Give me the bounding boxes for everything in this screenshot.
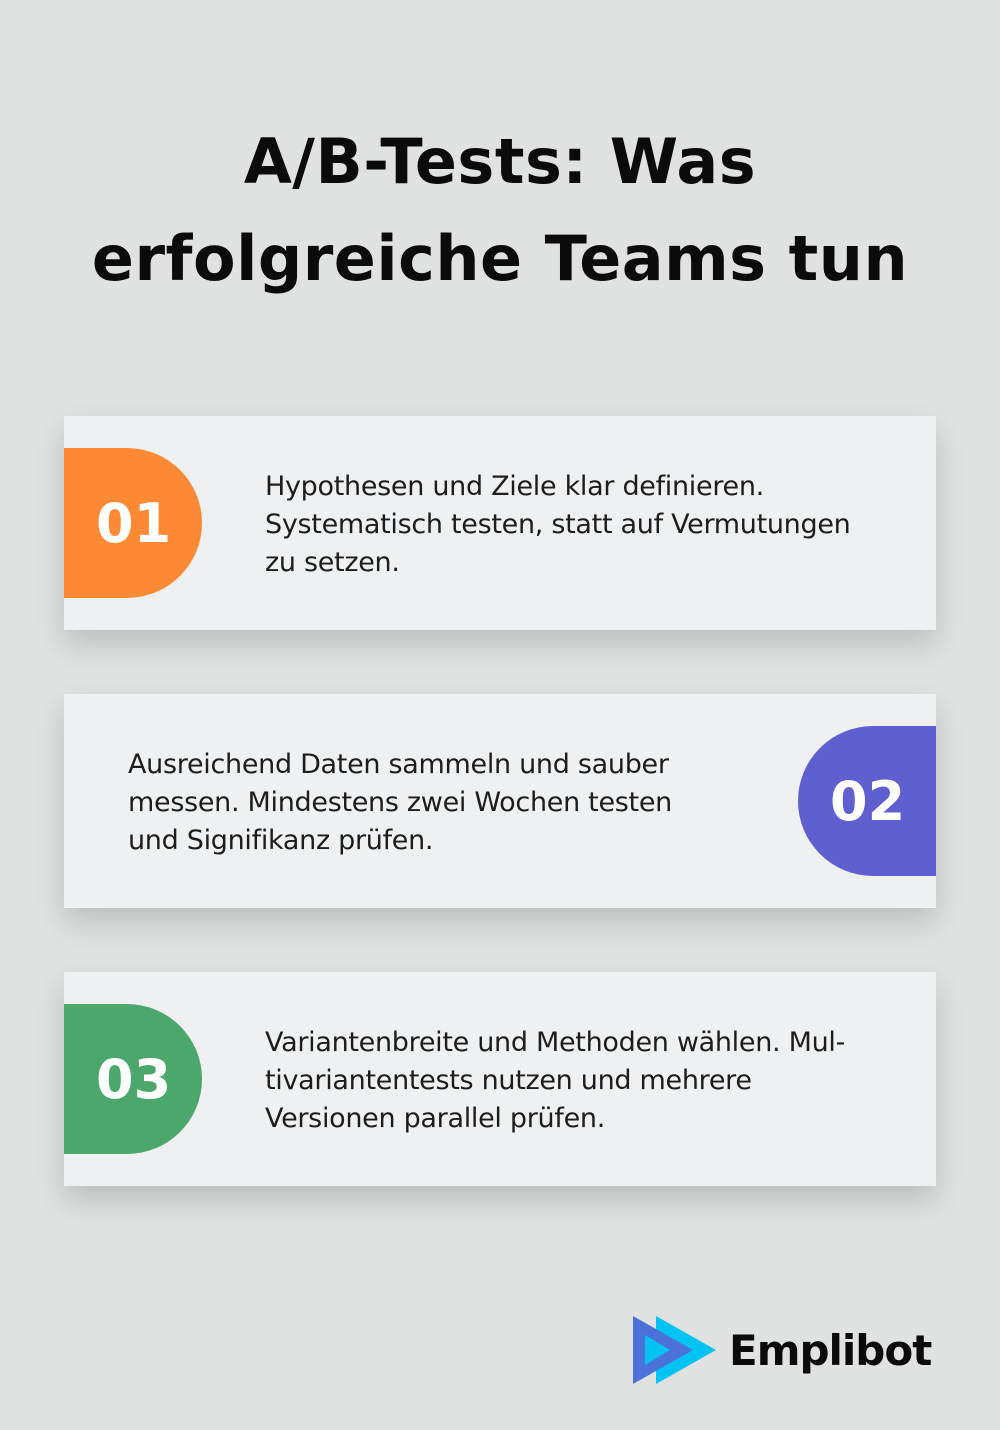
- badge 03: 03: [96, 1048, 171, 1111]
- panel: step 1: [64, 416, 936, 630]
- brand name: Emplibot: [729, 1326, 931, 1375]
- badge 01: 01: [96, 492, 171, 555]
- badge 01: [64, 448, 202, 598]
- logo: [633, 1316, 932, 1384]
- badge 02: [798, 726, 936, 876]
- badge 02: 02: [830, 770, 905, 833]
- title: erfolgreiche Teams tun: [92, 222, 908, 295]
- text 1: Hypothesen und Ziele klar definieren. Systematisch testen, statt auf Vermutungen zu setzen.: [265, 471, 850, 578]
- text 3: Variantenbreite und Methoden wählen. Mul-tivariantentests nutzen und mehrere Versionen parallel prüfen.: [265, 1027, 845, 1134]
- badge 03: [64, 1004, 202, 1154]
- title: [92, 125, 908, 295]
- panel: step 2: [64, 694, 936, 908]
- icon: play triangles: [633, 1316, 716, 1384]
- text 2: Ausreichend Daten sammeln und sauber messen. Mindestens zwei Wochen testen und Signifikanz prüfen.: [128, 749, 672, 856]
- title: A/B-Tests: Was: [244, 125, 756, 198]
- panel: step 3: [64, 972, 936, 1186]
